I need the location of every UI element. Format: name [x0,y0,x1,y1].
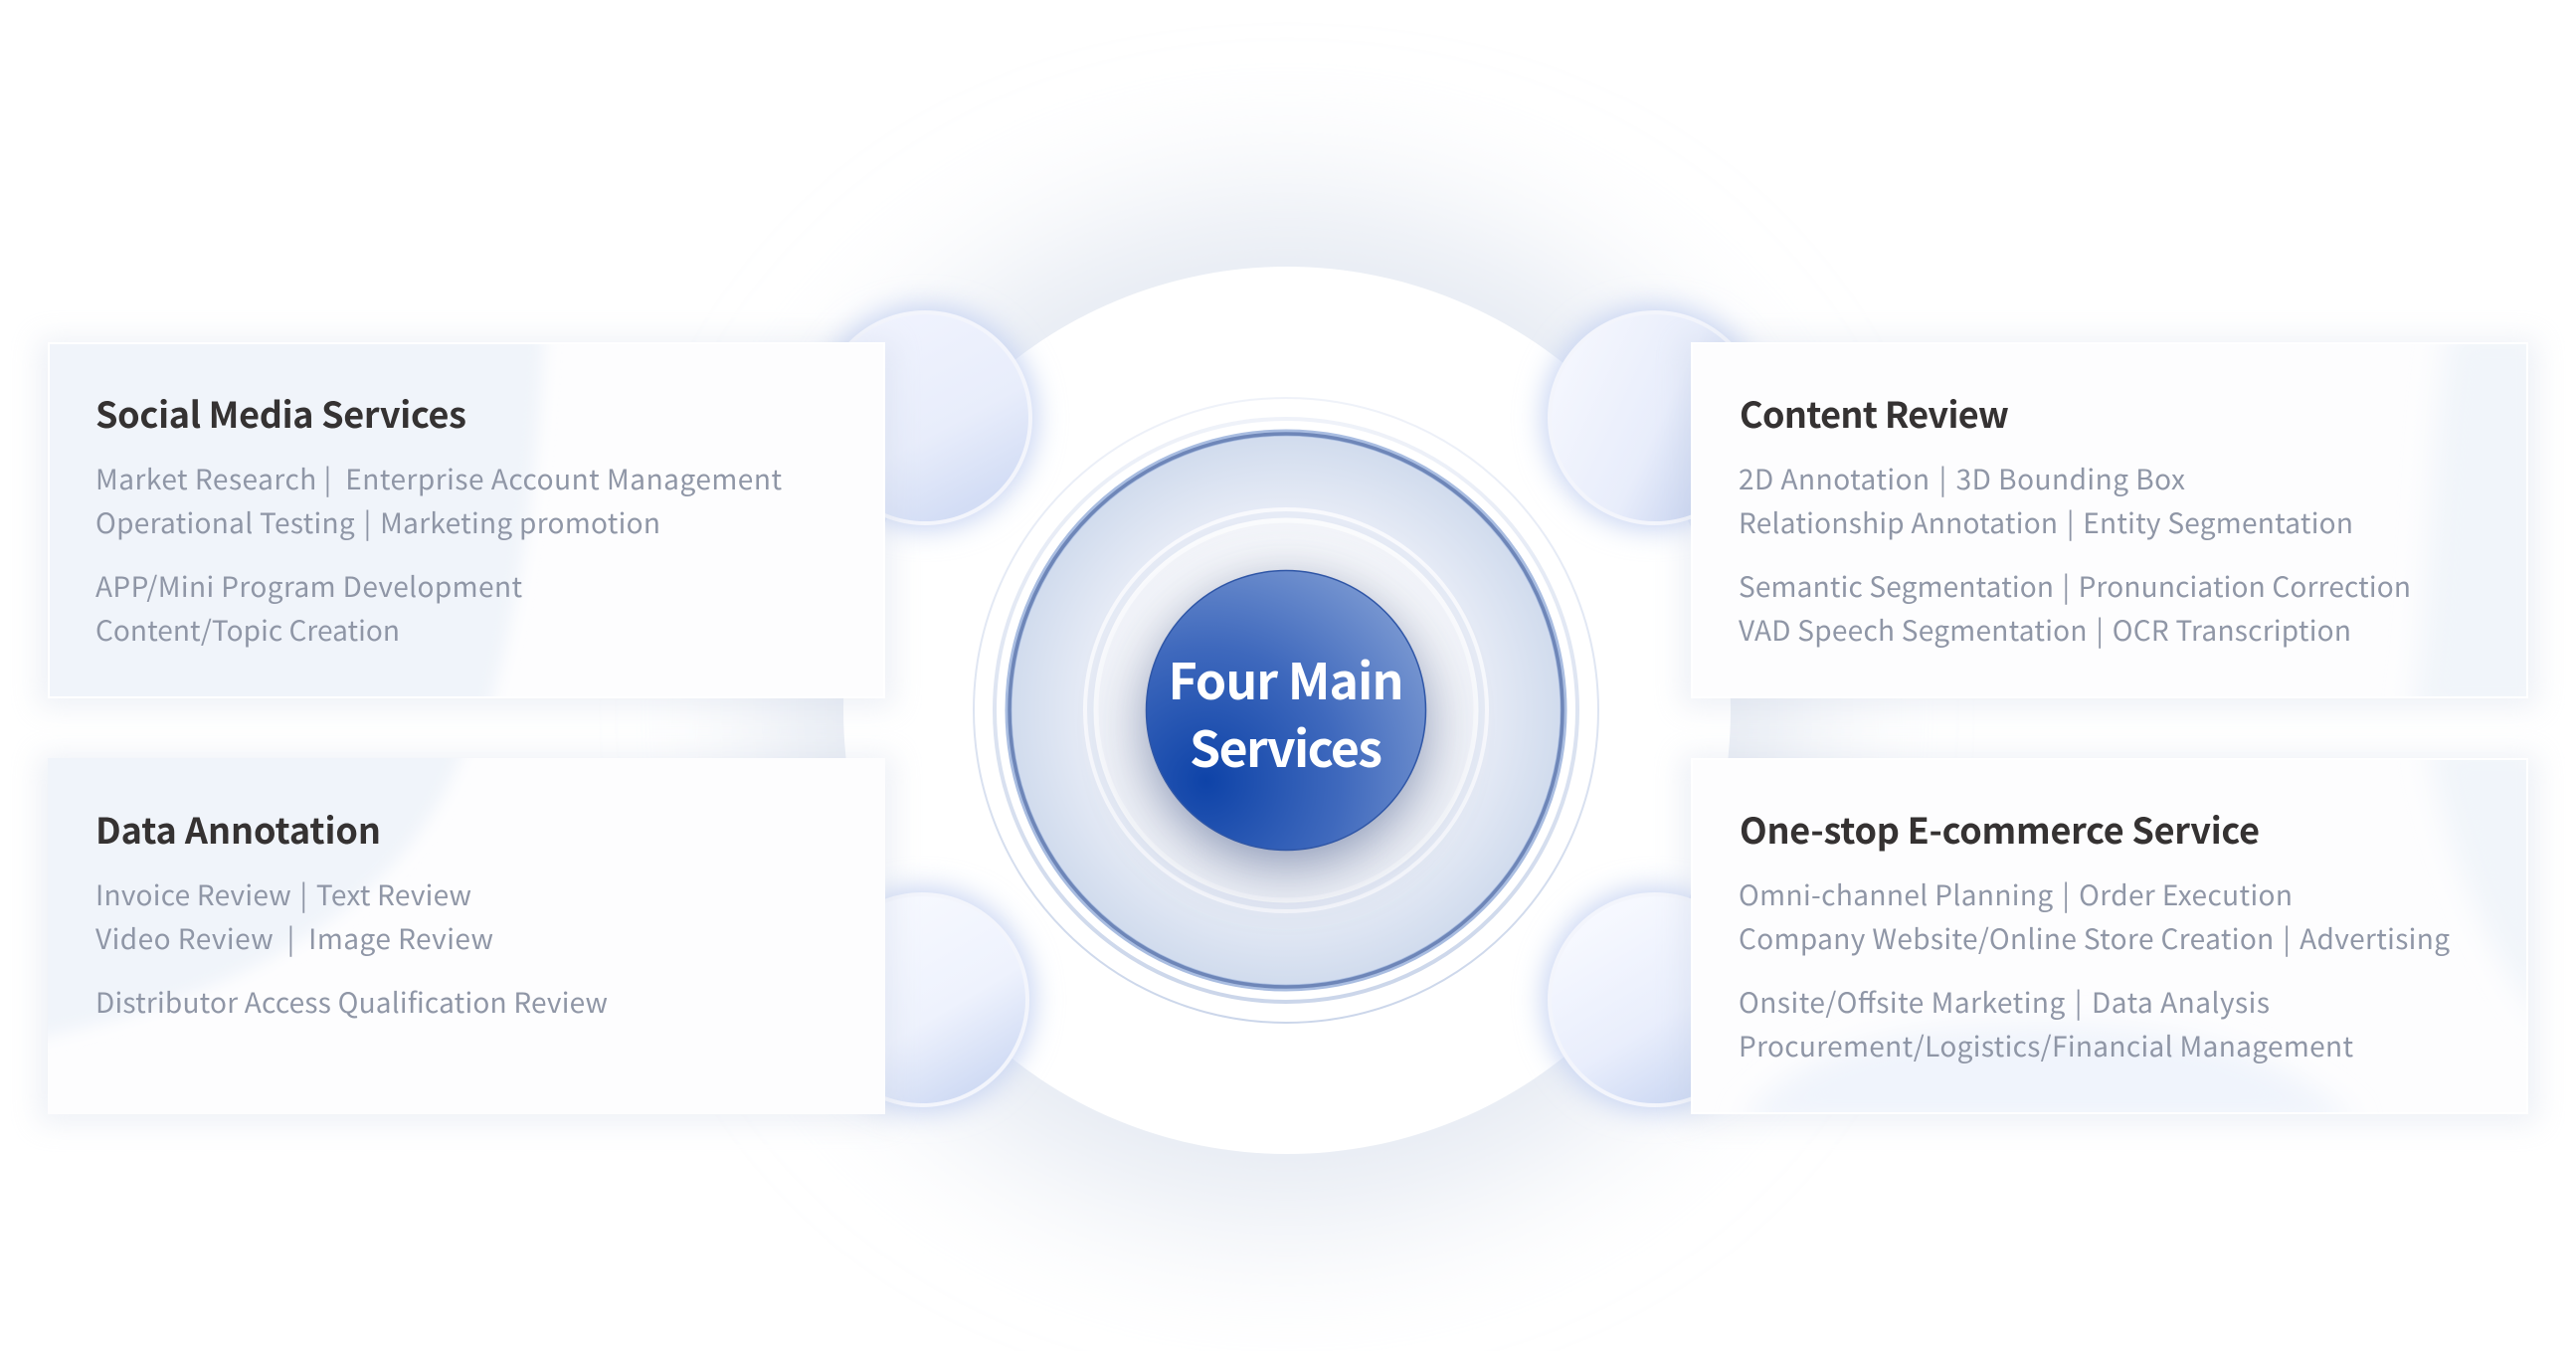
service list: Market Research | Enterprise Account Management [95,459,782,498]
service list: Omni-channel Planning | Order Execution [1739,874,2293,914]
satellite circle: bottom right [1544,888,1766,1111]
central hub with rings [974,398,1598,1023]
satellite circle: top left [814,306,1036,529]
heading: Social Media Services [95,387,466,439]
service list: Company Website/Online Store Creation | Advertising [1739,918,2450,958]
panel: One-stop E-commerce Service [1681,741,2546,1124]
heading: One-stop E-commerce Service [1740,803,2260,855]
hub shadow [1145,585,1427,868]
service list [95,874,608,1022]
service list: 2D Annotation | 3D Bounding Box [1739,459,2185,498]
service list: Onsite/Offsite Marketing | Data Analysis [1739,982,2270,1022]
service list: Relationship Annotation | Entity Segmentation [1739,502,2353,542]
service list: Content/Topic Creation [95,610,400,650]
service list: Invoice Review | Text Review [95,874,471,914]
service list: APP/Mini Program Development [95,566,522,606]
panel: Social Media Services [30,328,895,716]
outer thin ring [974,398,1598,1023]
service list [95,459,782,650]
service list: Video Review | Image Review [95,918,493,958]
heading: Data Annotation [95,803,381,855]
service list: Distributor Access Qualification Review [95,982,608,1022]
heading: Content Review [1740,387,2009,439]
panel: Content Review [1681,328,2546,716]
background glow [778,200,1796,1219]
service list [1739,459,2411,650]
main disc [1009,433,1564,988]
service list: Operational Testing | Marketing promotion [95,502,660,542]
satellite circle: top right [1544,306,1766,529]
service list: Procurement/Logistics/Financial Management [1739,1026,2353,1065]
hub label: Services [1190,710,1382,782]
hub label: Four Main [1168,643,1404,714]
service list [1739,874,2450,1065]
satellite circle: bottom left [811,888,1033,1111]
hub label [1168,643,1404,782]
service list: Semantic Segmentation | Pronunciation Correction [1739,566,2411,606]
inner rings [1085,509,1487,911]
service list: VAD Speech Segmentation | OCR Transcription [1739,610,2351,650]
large white circle [843,267,1731,1154]
hub circle [1146,571,1426,850]
panel: Data Annotation [30,741,895,1124]
middle ring [995,419,1577,1002]
